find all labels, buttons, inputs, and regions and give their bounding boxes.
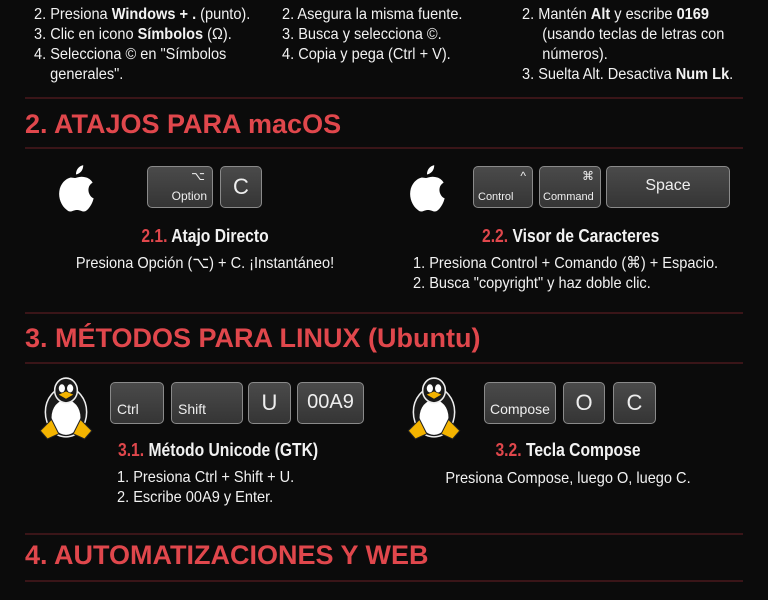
heading: linux: 3. MÉTODOS PARA LINUX (Ubuntu) — [25, 323, 480, 353]
text block: word steps: 4. Copia y pega (Ctrl + V). — [282, 46, 451, 63]
keys: control command space: Space — [645, 177, 691, 194]
keys: control command space: Control — [478, 191, 513, 203]
text block: windows steps: 2. Presiona Windows + . (punto). — [34, 6, 250, 23]
text block: windows steps: generales". — [50, 66, 123, 83]
keys: ctrl shift u 00a9: U — [262, 390, 277, 415]
text: 3.1 body: 1. Presiona Ctrl + Shift + U. — [117, 469, 294, 486]
keys: option c: ⌥ — [191, 169, 205, 183]
text block: alt code steps: números). — [542, 46, 608, 63]
subheading 3.2: 3.2. Tecla Compose — [495, 440, 641, 460]
keys: option c — [147, 166, 262, 208]
icon: penguin right — [408, 377, 460, 440]
text block: windows steps — [34, 6, 250, 83]
text block: word steps: 2. Asegura la misma fuente. — [282, 6, 462, 23]
text: 3.1 body: 2. Escribe 00A9 y Enter. — [117, 489, 273, 506]
subheading 3.1: 3.1. Método Unicode (GTK) — [118, 440, 318, 460]
text block: alt code steps — [522, 6, 733, 83]
keys: control command space: ⌘ — [582, 169, 594, 183]
keys: compose o c: Compose — [490, 401, 550, 417]
keys: compose o c: C — [627, 390, 642, 415]
text: 3.1 body — [117, 469, 294, 506]
keys: option c: C — [233, 174, 249, 199]
keys: ctrl shift u 00a9: 00A9 — [307, 391, 354, 413]
keys: ctrl shift u 00a9: Ctrl — [117, 401, 139, 417]
keys: option c: Option — [172, 189, 207, 203]
text block: alt code steps: (usando teclas de letras con — [542, 26, 724, 43]
icon: apple right — [410, 165, 445, 212]
text: 2.2 body: 2. Busca "copyright" y haz doble clic. — [413, 275, 651, 292]
keys: compose o c — [484, 382, 656, 424]
text: 2.2 body: 1. Presiona Control + Comando (⌘) + Espacio. — [413, 255, 718, 272]
text block: alt code steps: 3. Suelta Alt. Desactiva Num Lk. — [522, 66, 733, 83]
text block: word steps: 3. Busca y selecciona ©. — [282, 26, 442, 43]
text block: word steps — [282, 6, 462, 63]
keys: ctrl shift u 00a9 — [110, 382, 364, 424]
text block: windows steps: 4. Selecciona © en "Símbolos — [34, 46, 226, 63]
keys: ctrl shift u 00a9: Shift — [178, 401, 206, 417]
keys: control command space: ^ — [520, 169, 526, 183]
text block: windows steps: 3. Clic en icono Símbolos (Ω). — [34, 26, 232, 43]
text: 2.2 body — [413, 255, 718, 292]
heading: macOS: 2. ATAJOS PARA macOS — [25, 109, 341, 139]
heading: automatizaciones: 4. AUTOMATIZACIONES Y WEB — [25, 540, 429, 570]
keys: control command space: Command — [543, 191, 594, 203]
keys: control command space — [473, 166, 730, 208]
text: 3.2 body: Presiona Compose, luego O, luego C. — [445, 470, 691, 487]
subheading 2.2: 2.2. Visor de Caracteres — [482, 226, 659, 246]
icon: penguin left — [40, 377, 92, 440]
icon: apple left — [59, 165, 94, 212]
keys: compose o c: O — [575, 390, 593, 415]
subheading 2.1: 2.1. Atajo Directo — [141, 226, 269, 246]
text block: alt code steps: 2. Mantén Alt y escribe 0169 — [522, 6, 709, 23]
text: 2.1 body: Presiona Opción (⌥) + C. ¡Instantáneo! — [76, 255, 334, 272]
